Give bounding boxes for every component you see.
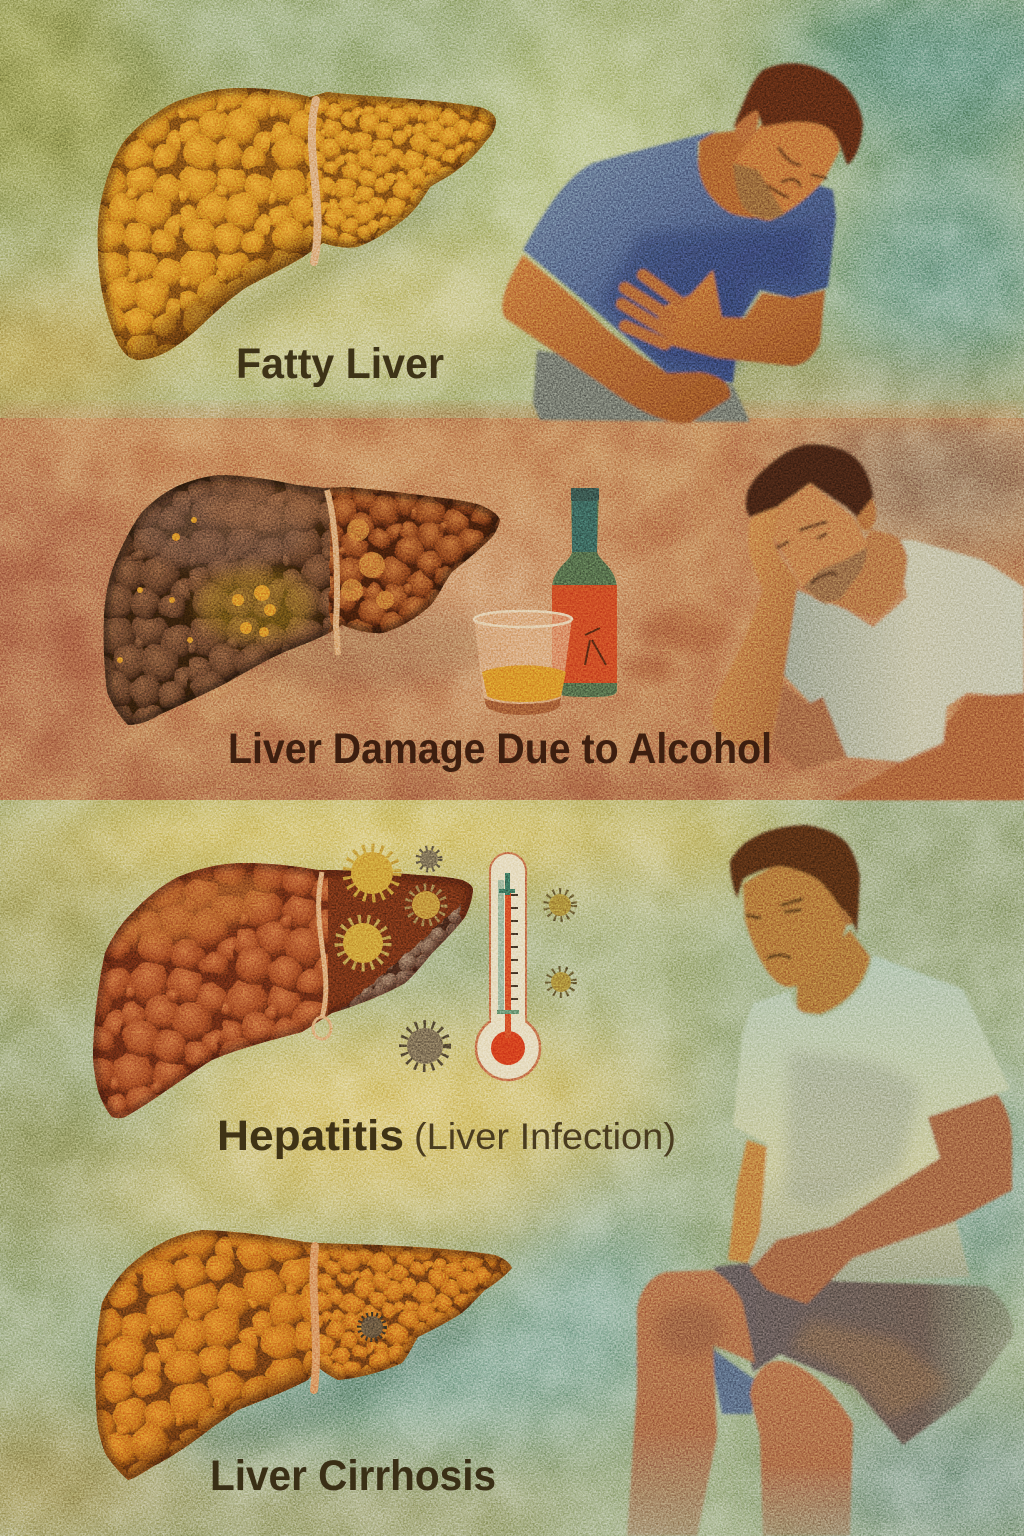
heading: Hepatitis (Liver Infection): (Liver Infection) [414,1116,676,1157]
figure: man with headache [712,444,1024,800]
figure: seated man [627,825,1013,1536]
left arm and hand on abdomen [502,255,730,423]
shirt shading [600,225,815,370]
icon: virus on liver 3 [339,919,387,967]
neck [797,930,870,1014]
heading: Liver Damage Due to Alcohol: Liver Damage Due to Alcohol [228,725,772,773]
left arm raised to head [712,507,797,750]
liver: alcohol damaged [104,475,500,725]
facial features [776,522,836,583]
ligament [312,100,318,262]
liver: hepatitis [85,860,483,1125]
hair [730,825,860,934]
rear leg [750,1361,853,1536]
icon: thermometer [476,853,540,1080]
t-shirt [782,540,1024,762]
head [733,112,840,220]
figure: man holding abdomen [502,63,863,423]
head [763,483,867,604]
stubble [733,163,785,219]
ligament [319,872,326,1018]
heading: Fatty Liver: Fatty Liver [236,340,444,388]
ligament [327,490,338,655]
liver: fatty liver [98,88,496,360]
hair [746,444,873,517]
icon: virus floating 2 [546,891,574,919]
ear [731,101,763,145]
icon: whisky glass [474,610,572,715]
head [743,862,847,987]
shirt shading [785,1050,920,1210]
chair [633,1340,755,1414]
heading: Liver Cirrhosis: Liver Cirrhosis [210,1452,496,1500]
knee shading [656,1302,724,1358]
panel: alcohol damage background [0,410,1024,828]
heading: Hepatitis (Liver Infection): Hepatitis [217,1112,404,1160]
scar spot [359,1314,385,1340]
icon: virus floating 1 [418,848,440,870]
icon: whisky bottle [552,488,617,697]
panel divider soft edge [0,406,1024,426]
ear [856,495,876,531]
stubble [803,547,867,603]
neck [697,130,790,220]
shorts [713,1263,1013,1445]
left arm [728,1140,773,1263]
panel: fatty liver background [0,0,1024,437]
icon: virus on liver 1 [347,848,397,898]
icon: virus floating 4 [403,1024,447,1068]
right forearm and hand on chest [622,270,825,366]
t-shirt [733,955,1010,1281]
hair [733,63,863,165]
front leg [627,1270,755,1536]
liver: cirrhosis [95,1230,512,1480]
ear [839,885,859,925]
ligament [314,1246,316,1390]
facial features [747,899,802,958]
facial features [768,148,826,197]
right arm [833,693,1024,800]
upper arm behind [772,683,847,770]
icon: virus on liver 2 [408,887,444,923]
panel: hepatitis and cirrhosis background [0,780,1024,1536]
trousers [533,350,750,422]
neck [833,530,907,617]
heading: Hepatitis (Liver Infection) [217,1112,676,1160]
blue t-shirt [523,130,836,383]
icon: virus floating 3 [548,969,574,995]
right arm and hand [750,1094,1012,1304]
